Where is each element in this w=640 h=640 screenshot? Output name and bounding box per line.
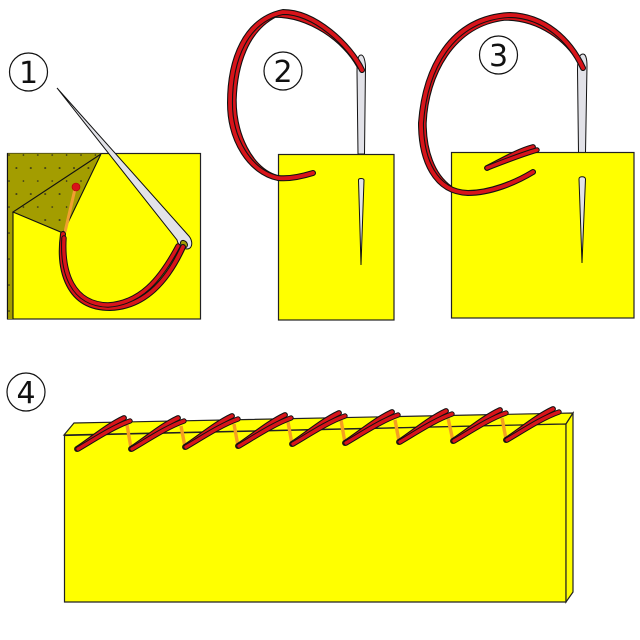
- fabric: [278, 154, 394, 320]
- block side face: [566, 413, 573, 602]
- needle outline through slit: [579, 177, 586, 263]
- panel 2: needle through fabric: [230, 12, 394, 320]
- panel 3: second stitch: [421, 15, 634, 318]
- panel 4: finished seam on fabric block: [64, 409, 573, 602]
- fabric square: [8, 154, 200, 319]
- number badge 2: [264, 52, 302, 90]
- needle outline through slit: [358, 178, 364, 265]
- folded corner: dotted underside: [8, 154, 101, 319]
- number badge 2: 2: [273, 55, 293, 90]
- number badge 3: [480, 36, 518, 74]
- number badge 3: 3: [489, 39, 508, 74]
- thread: [230, 12, 362, 178]
- thread: [421, 15, 583, 193]
- needle eye: [179, 239, 189, 249]
- thread under fabric: [65, 189, 75, 232]
- panel 1: folded fabric with needle: [8, 88, 200, 319]
- number badge 4: 4: [16, 376, 36, 411]
- fabric: [452, 152, 634, 318]
- orange thread segments: [127, 418, 506, 448]
- stitches: [77, 409, 559, 449]
- block front face: [64, 424, 566, 602]
- number badge 4: [7, 373, 45, 411]
- second stitch on fabric: [487, 147, 537, 168]
- number badge 1: [10, 53, 48, 91]
- fold outline: [8, 154, 101, 319]
- thread: [62, 234, 183, 308]
- block top face: [64, 413, 573, 435]
- needle upper part: [357, 55, 366, 154]
- needle upper part: [578, 54, 587, 153]
- thread knot: [72, 183, 80, 191]
- needle: [57, 88, 192, 249]
- number badge 1: 1: [19, 56, 38, 91]
